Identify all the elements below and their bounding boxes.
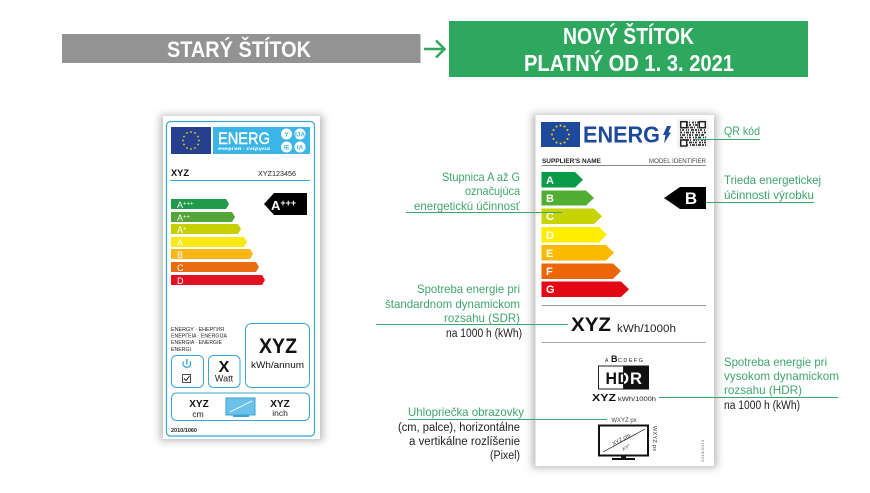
callout: HDR consumption: na 1000 h (kWh) xyxy=(724,400,800,412)
chart: new energy scale A to G: C xyxy=(546,211,554,223)
callout: screen diagonal: (Pixel) xyxy=(490,450,520,462)
callout: efficiency class: účinnosti výrobku xyxy=(724,188,814,202)
callout: SDR consumption: Spotreba energie pri xyxy=(417,282,520,296)
text: energy in languages: ENERGIA · ENERGIE xyxy=(171,340,222,346)
chart: old energy scale A+++ to D: A xyxy=(177,213,183,223)
icon: HDR class xyxy=(592,356,656,401)
text: supplier and model: XYZ123456 xyxy=(258,169,296,178)
box: screen size: cm xyxy=(192,409,204,419)
text: SDR consumption: kWh/1000h xyxy=(617,323,676,335)
chart: old energy scale A+++ to D: A xyxy=(177,238,183,248)
text: SDR consumption xyxy=(542,305,706,343)
callout: SDR consumption: štandardnom dynamickom xyxy=(385,297,520,311)
marker: old rating A+++: +++ xyxy=(280,198,296,208)
callout: SDR consumption: na 1000 h (kWh) xyxy=(446,328,522,340)
icon: EU flag xyxy=(541,122,580,147)
text: energy in languages: ΕΝΕΡΓΕΙΑ · ENERGIJA xyxy=(171,334,227,340)
callout: efficiency class: Trieda energetickej xyxy=(724,173,821,187)
callout: efficiency class xyxy=(706,173,821,202)
chart: new energy scale A to G: G xyxy=(546,284,555,296)
text: SDR consumption: XYZ xyxy=(571,315,611,336)
text: energy in languages: ENERGY · ЕНЕРГИЯ xyxy=(171,327,224,333)
chart: new energy scale A to G: D xyxy=(546,230,554,242)
callout: scale A to G: Stupnica A až G xyxy=(442,170,520,184)
text: supplier and model identifier: MODEL IDENTIFIER xyxy=(649,158,706,165)
callout: QR code: QR kód xyxy=(724,124,760,138)
logo: ENERG banner xyxy=(213,127,310,154)
panel: old energy label xyxy=(160,115,323,441)
callout: SDR consumption: rozsahu (SDR) xyxy=(444,311,520,325)
callout: HDR consumption: rozsahu (HDR) xyxy=(724,383,802,397)
icon: TV with dimensions: XY" xyxy=(621,443,632,453)
callout: scale A to G: označujúca xyxy=(465,184,520,198)
logo: ENERG banner: IE xyxy=(283,144,290,152)
callout: HDR consumption: Spotreba energie pri xyxy=(724,355,827,369)
chart: old energy scale A+++ to D: A xyxy=(177,200,183,210)
chart: old energy scale A+++ to D: + xyxy=(183,226,187,232)
text: supplier and model identifier: SUPPLIER'S NAME xyxy=(542,158,602,165)
callout: scale A to G: energetickú účinnosť xyxy=(414,199,520,213)
icon: TV with dimensions: 2019/2013 xyxy=(700,439,705,462)
icon: TV with dimensions xyxy=(599,418,705,462)
box: screen size: inch xyxy=(272,408,288,418)
marker: new rating B: B xyxy=(685,189,697,208)
panel: new energy label xyxy=(532,114,717,468)
icon: TV with dimensions: WXYZ px xyxy=(611,418,637,424)
callout: screen diagonal: a vertikálne rozlíšenie xyxy=(409,436,520,448)
box: power in watts: X xyxy=(219,359,230,376)
text: supplier and model: XYZ xyxy=(171,168,189,179)
logo: ENERG banner: ENERG xyxy=(218,130,270,148)
box: annual consumption: kWh/annum xyxy=(251,360,304,370)
icon: EU flag xyxy=(171,127,211,154)
chart: old energy scale A+++ to D xyxy=(171,199,265,286)
icon: HDR class: H xyxy=(606,369,617,388)
icon: QR code xyxy=(677,119,709,149)
box: screen size: XYZ xyxy=(270,399,290,410)
callout: screen diagonal: (cm, palce), horizontálne xyxy=(398,422,520,434)
chart: new energy scale A to G xyxy=(542,172,629,297)
box: annual consumption: XYZ xyxy=(259,335,297,358)
logo: ENERG banner: Y xyxy=(284,132,289,138)
icon: HDR class: CDEFG xyxy=(618,358,643,364)
chart: old energy scale A+++ to D: C xyxy=(177,263,184,273)
box: power in watts: Watt xyxy=(215,374,234,384)
icon: HDR class: A xyxy=(605,358,609,364)
logo: ENERG: ENERG xyxy=(583,122,660,148)
marker: new rating B xyxy=(664,187,706,209)
text: regulation number: 2010/1060 xyxy=(171,428,197,434)
chart: new energy scale A to G: E xyxy=(546,248,553,260)
chart: old energy scale A+++ to D: ++ xyxy=(183,214,191,220)
marker: old rating A+++: A xyxy=(271,198,280,213)
callout: screen diagonal: Uhlopriečka obrazovky xyxy=(408,405,524,419)
icon: HDR class: XYZ xyxy=(592,392,617,404)
text: supplier and model xyxy=(170,168,310,181)
heading: old label xyxy=(62,34,420,63)
chart: old energy scale A+++ to D: D xyxy=(177,276,184,286)
callout: QR code xyxy=(695,124,760,140)
callout: screen diagonal xyxy=(398,405,607,462)
text: energy in languages xyxy=(171,327,227,353)
box: screen size xyxy=(172,393,310,420)
icon: HDR class: D xyxy=(618,369,629,388)
heading: new label: NOVÝ ŠTÍTOK xyxy=(563,22,694,49)
heading: old label: STARÝ ŠTÍTOK xyxy=(167,37,311,62)
callout: scale A to G xyxy=(406,170,562,213)
heading: new label: PLATNÝ OD 1. 3. 2021 xyxy=(524,49,734,76)
icon: HDR class: D xyxy=(618,369,629,388)
box: power switch icon xyxy=(172,356,204,388)
callout: SDR consumption xyxy=(376,282,568,340)
chart: new energy scale A to G: A xyxy=(546,175,554,187)
box: power in watts xyxy=(208,356,240,388)
callout: HDR consumption xyxy=(659,355,839,412)
chart: old energy scale A+++ to D: +++ xyxy=(183,202,194,208)
chart: new energy scale A to G: F xyxy=(546,266,553,278)
box: annual consumption xyxy=(246,324,310,388)
callout: HDR consumption: vysokom dynamickom xyxy=(724,369,839,383)
chart: new energy scale A to G: B xyxy=(546,193,554,205)
arrow: old to new xyxy=(424,40,444,58)
icon: TV with dimensions: XYZ cm xyxy=(612,433,632,447)
icon: TV with dimensions: WXYZ px xyxy=(651,426,657,451)
chart: old energy scale A+++ to D: B xyxy=(177,250,183,260)
icon: HDR class: kWh/1000h xyxy=(618,396,656,403)
box: screen size: XYZ xyxy=(189,399,209,410)
icon: HDR class: R xyxy=(630,369,642,388)
icon: HDR class: B xyxy=(611,354,618,364)
text: energy in languages: ENERGI xyxy=(171,347,191,353)
logo: ENERG banner: IA xyxy=(297,144,304,152)
logo: ENERG banner: енергия · ενέργεια xyxy=(218,146,270,151)
text: supplier and model identifier xyxy=(542,158,706,166)
chart: old energy scale A+++ to D: A xyxy=(177,225,183,235)
logo: ENERG banner: IJA xyxy=(295,132,305,138)
marker: old rating A+++ xyxy=(264,193,307,215)
heading: new label xyxy=(449,21,808,77)
